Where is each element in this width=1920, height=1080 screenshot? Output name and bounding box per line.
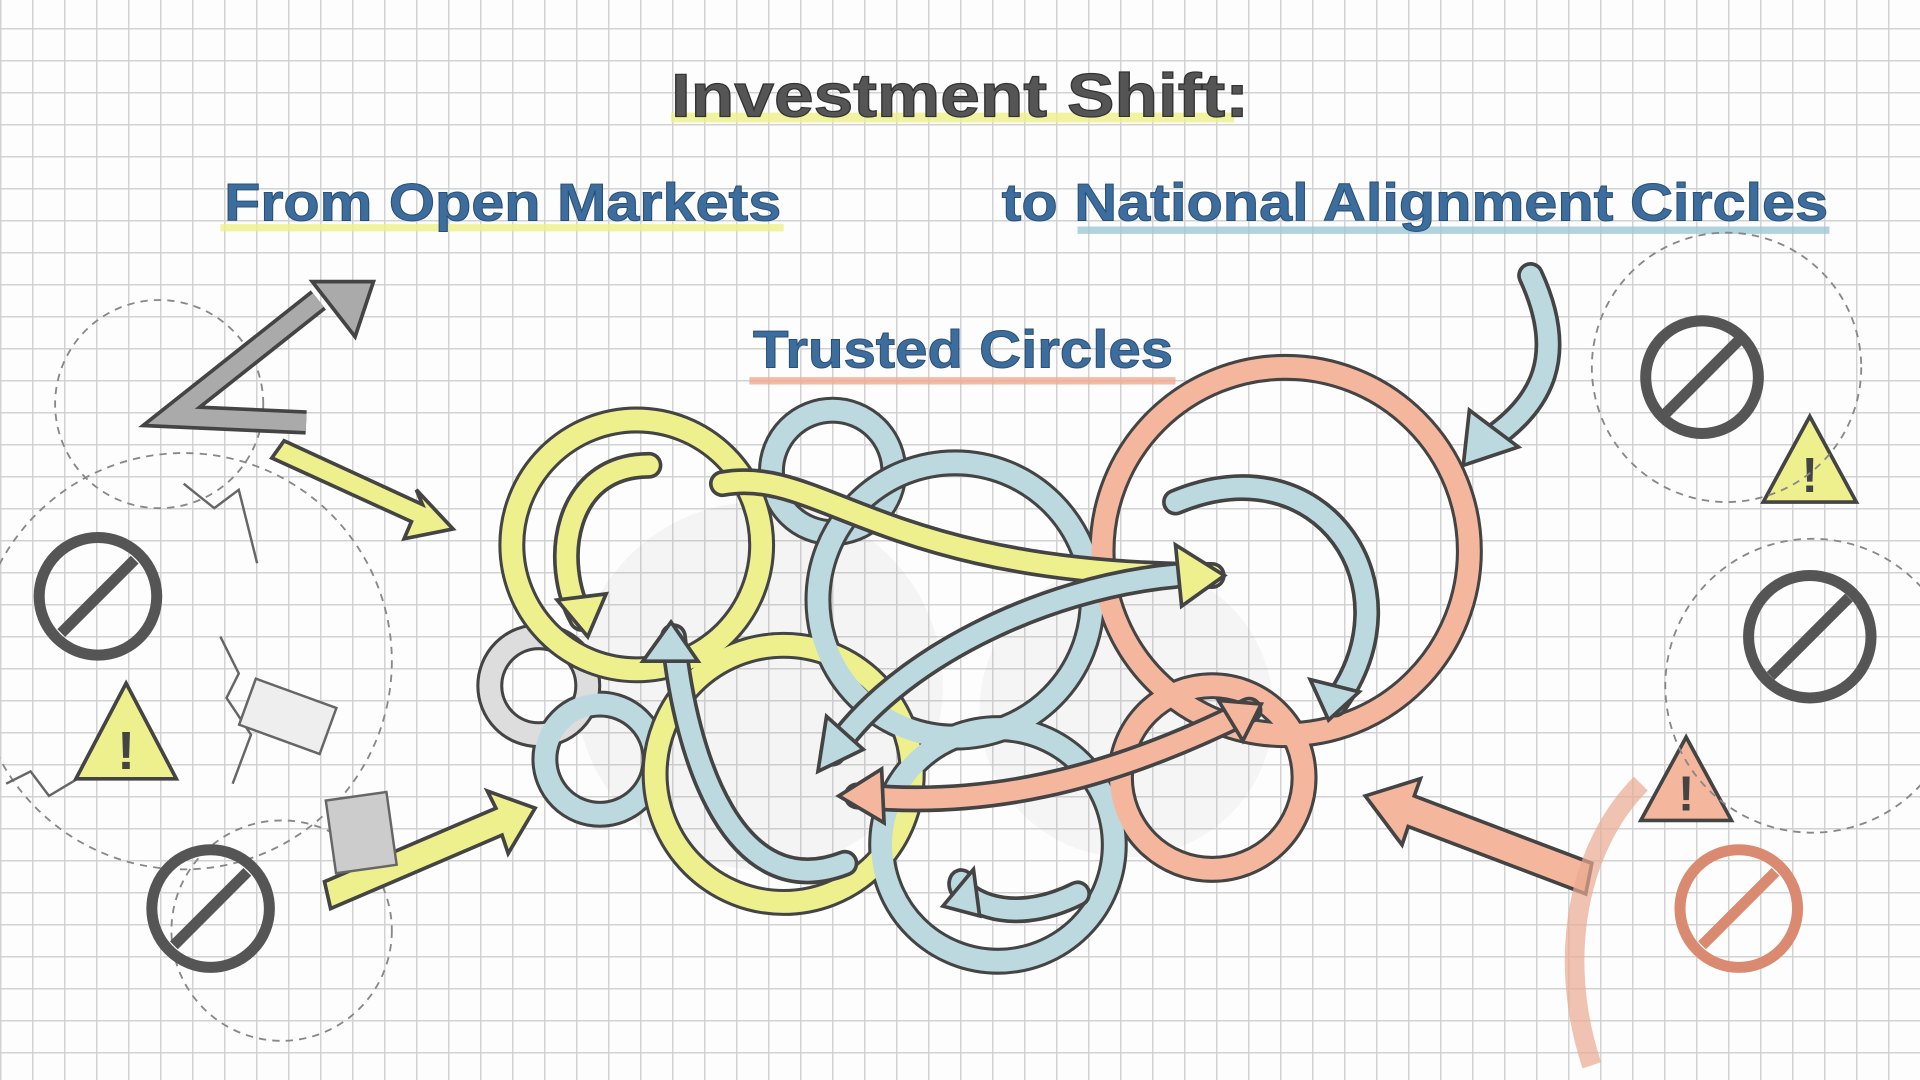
orange arrow [1365,779,1592,894]
inner flow arrows [566,465,1367,910]
subtitle: from open markets: From Open Markets [224,173,781,232]
arrowheads [557,545,1359,916]
yellow arrow lower [324,791,535,909]
gray zigzag arrow [171,282,373,422]
icons: warning triangles: ! [1678,768,1694,822]
central interlocking circles [490,367,1469,961]
icons: warning triangles [76,416,1856,822]
icons: warning triangles: ! [1802,449,1818,503]
left side: scattered open markets [0,282,535,1041]
right side arrows [1365,233,1920,1065]
icons: stop signs [39,321,1871,967]
yellow arrow upper [272,441,453,539]
heading: trusted circles: Trusted Circles [753,320,1173,379]
subtitle: to national alignment circles: to National Alignment Circles [1002,173,1828,232]
title: Investment Shift: [671,61,1249,129]
blue curved arrow [1463,276,1548,465]
icons: warning triangles: ! [117,721,135,781]
